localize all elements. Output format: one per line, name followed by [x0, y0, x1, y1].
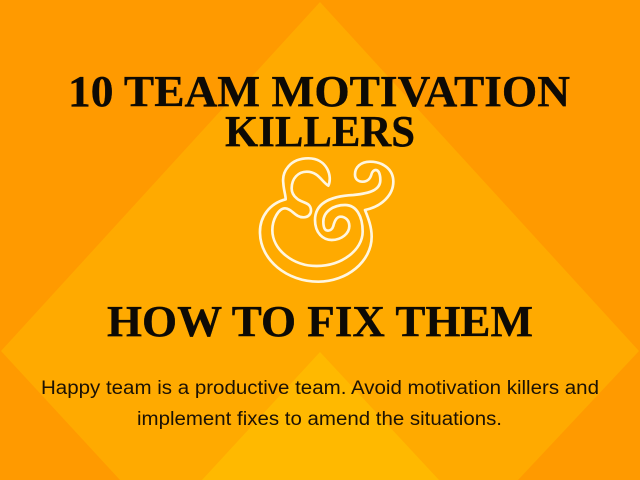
subtitle: HOW TO FIX THEM [107, 297, 533, 346]
body text line 1: Happy team is a productive team. Avoid motivation killers and [41, 378, 599, 399]
title line 2: KILLERS [225, 107, 415, 156]
title line 1: 10 TEAM MOTIVATION [68, 67, 570, 116]
icon: outlined ampersand [260, 158, 393, 282]
background small triangle [202, 352, 439, 480]
body text line 2: implement fixes to amend the situations. [137, 409, 502, 430]
